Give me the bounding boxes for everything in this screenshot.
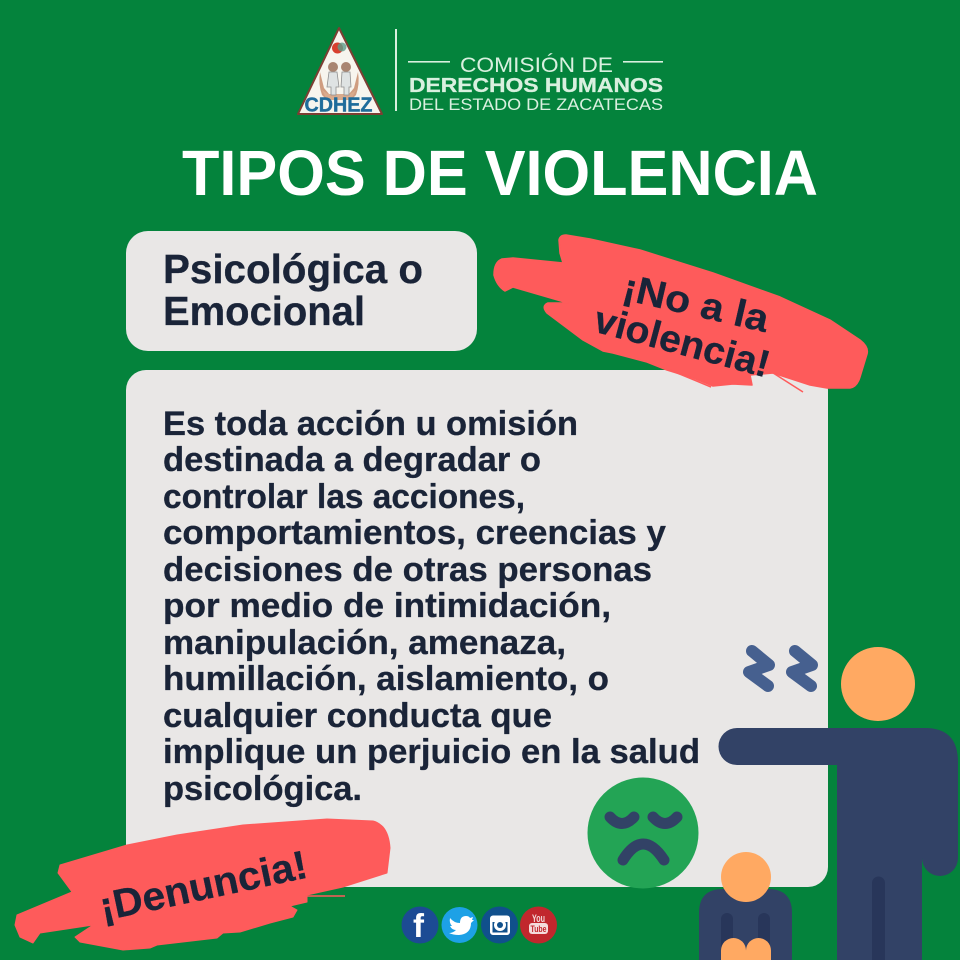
- icon: CDHEZ triangle emblem: CDHEZ: [304, 94, 372, 116]
- illustration: crouching child: [699, 852, 792, 960]
- heading: violence type: Emocional: [163, 288, 365, 334]
- text block: definition: Es toda acción u omisión: [163, 405, 578, 443]
- callout text: ¡Denuncia!: [96, 843, 311, 930]
- text block: definition: psicológica.: [163, 770, 362, 808]
- text block: definition: por medio de intimidación,: [163, 587, 611, 625]
- adult head: [841, 647, 915, 721]
- panel: definition: [126, 370, 828, 887]
- child head: [721, 852, 771, 902]
- callout text: violencia!: [590, 299, 774, 386]
- icon: facebook: [402, 906, 438, 944]
- text block: definition: [163, 405, 700, 808]
- icon: CDHEZ triangle emblem: [298, 28, 382, 116]
- text block: definition: decisiones de otras personas: [163, 551, 652, 589]
- callout: denuncia: [15, 819, 390, 950]
- text block: definition: humillación, aislamiento, o: [163, 660, 609, 698]
- icon: facebook: f: [413, 907, 425, 944]
- icon: youtube: Tube: [530, 924, 546, 935]
- organisation name: COMISIÓN DE: [460, 54, 613, 77]
- adult body: [718, 728, 958, 960]
- organisation name: [409, 54, 663, 114]
- illustration: pointing adult: [718, 647, 958, 960]
- icon: instagram: [481, 906, 518, 944]
- organisation name: DERECHOS HUMANOS: [409, 74, 663, 97]
- text block: definition: cualquier conducta que: [163, 697, 552, 735]
- social media icons: [402, 906, 557, 944]
- organisation name: DEL ESTADO DE ZACATECAS: [409, 96, 663, 114]
- text block: definition: manipulación, amenaza,: [163, 624, 566, 662]
- text block: definition: destinada a degradar o: [163, 441, 541, 479]
- callout: no a la violencia: [494, 235, 867, 392]
- icon: anger zigzags: [749, 651, 812, 686]
- icon: youtube: [520, 906, 557, 944]
- panel: subtitle: [126, 231, 477, 351]
- icon: twitter: [442, 907, 478, 943]
- icon: sad face: [588, 778, 698, 888]
- icon: youtube: You: [532, 913, 545, 925]
- text block: definition: implique un perjuicio en la salud: [163, 733, 700, 771]
- text block: definition: comportamientos, creencias y: [163, 514, 666, 552]
- heading: violence type: [163, 246, 423, 334]
- title: TIPOS DE VIOLENCIA: [182, 137, 818, 209]
- header logo: [298, 28, 663, 116]
- callout text: ¡No a la: [619, 267, 774, 341]
- heading: violence type: Psicológica o: [163, 246, 423, 292]
- text block: definition: controlar las acciones,: [163, 478, 525, 516]
